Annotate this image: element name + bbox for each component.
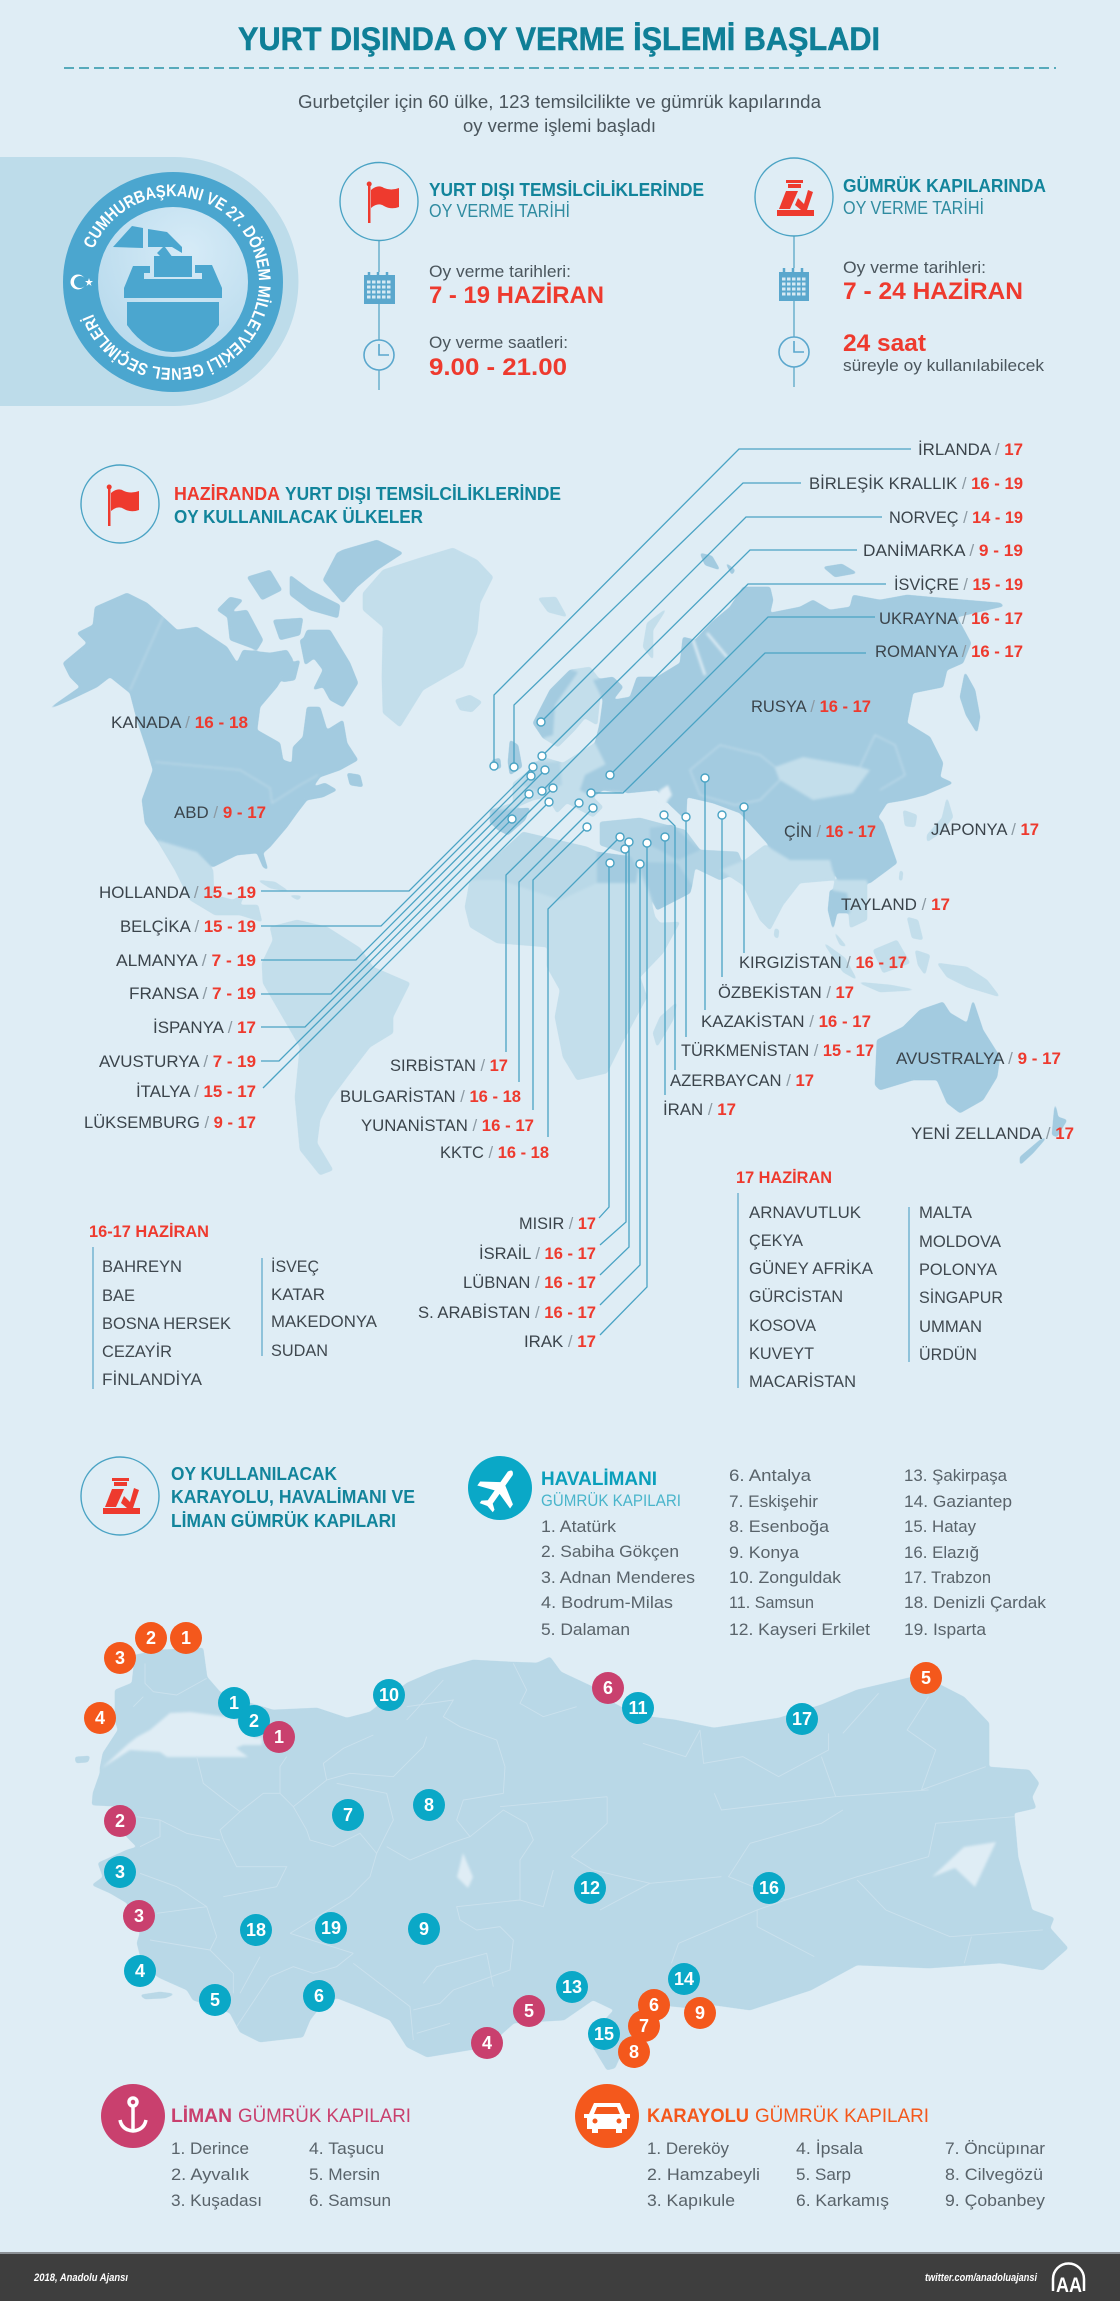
country labels: Europe right column: ROMANYA / 16 - 17 <box>875 642 1023 661</box>
map heading <box>81 465 561 543</box>
country labels: Europe right column <box>809 440 1023 661</box>
road gate list: 3. Kapıkule <box>647 2191 735 2210</box>
heading: GÜMRÜK KAPILARI <box>755 2106 929 2127</box>
heading text <box>174 484 561 527</box>
Madagascar <box>653 1002 677 1047</box>
road gate list: 8. Cilvegözü <box>945 2165 1043 2184</box>
airport pins: 3 <box>115 1862 125 1882</box>
country labels: Europe left column: AVUSTURYA / 7 - 19 <box>99 1052 256 1071</box>
country labels: Europe right column: UKRAYNA / 16 - 17 <box>879 609 1023 628</box>
road gate list: 5. Sarp <box>796 2165 851 2184</box>
country labels: Americas and world <box>111 697 1074 1143</box>
Middle East <box>600 818 745 910</box>
road gate pins: 5 <box>921 1668 931 1688</box>
duration text <box>843 330 1045 375</box>
Siberian river estuaries <box>693 633 727 675</box>
duration text: süreyle oy kullanılabilecek <box>843 356 1045 375</box>
panel: 17 June country list: ÜRDÜN <box>919 1345 977 1364</box>
New Zealand <box>1020 1102 1067 1165</box>
panel: 16-17 June country list: 16-17 HAZİRAN <box>89 1222 209 1241</box>
country labels: Europe left column: LÜKSEMBURG / 9 - 17 <box>84 1113 256 1132</box>
airport list: 6. Antalya <box>729 1466 812 1485</box>
airport pins: 2 <box>249 1711 259 1731</box>
road gate list: 6. Karkamış <box>796 2191 889 2210</box>
airport list: 19. Isparta <box>904 1620 987 1639</box>
Southeast Asia <box>832 880 867 928</box>
airport list: 16. Elazığ <box>904 1543 979 1562</box>
panel: 16-17 June country list: SUDAN <box>271 1341 328 1360</box>
airport pins: 12 <box>580 1878 600 1898</box>
heading text: KARAYOLU, HAVALİMANI VE <box>171 1487 415 1507</box>
port list <box>171 2139 391 2210</box>
heading: HAVALİMANI <box>541 1469 657 1490</box>
country labels: Middle East: IRAK / 17 <box>524 1332 596 1351</box>
port list: 2. Ayvalık <box>171 2165 250 2184</box>
panel: 17 June country list: SİNGAPUR <box>919 1288 1003 1307</box>
panel: 17 June country list: ÇEKYA <box>749 1231 804 1250</box>
road gate pins: 7 <box>639 2016 649 2036</box>
province borders west <box>133 1663 577 2040</box>
port list: 5. Mersin <box>309 2165 380 2184</box>
port list: 1. Derince <box>171 2139 249 2158</box>
port list: 6. Samsun <box>309 2191 391 2210</box>
port pins <box>104 1672 624 2059</box>
road gate list: 9. Çobanbey <box>945 2191 1046 2210</box>
panel: 16-17 June country list: MAKEDONYA <box>271 1312 378 1331</box>
country location dots <box>490 718 748 868</box>
panel: port customs gates <box>101 2084 411 2210</box>
airport list <box>541 1466 1047 1639</box>
country labels: Europe left column: BELÇİKA / 15 - 19 <box>120 917 256 936</box>
country labels: Europe right column: NORVEÇ / 14 - 19 <box>889 508 1023 527</box>
dates text <box>843 258 1023 305</box>
country labels: Middle East: MISIR / 17 <box>519 1214 596 1233</box>
airport pins: 7 <box>343 1805 353 1825</box>
road gate list: 4. İpsala <box>796 2139 864 2158</box>
Greenland <box>363 548 493 727</box>
Scandinavia <box>533 667 600 747</box>
world map <box>47 540 1067 1175</box>
airport pins: 1 <box>229 1693 239 1713</box>
country labels: Central Asia: TÜRKMENİSTAN / 15 - 17 <box>681 1041 874 1060</box>
panel: airport customs gates <box>468 1456 1047 1639</box>
heading: GÜMRÜK KAPILARINDA <box>843 176 1046 196</box>
country labels: Middle East: S. ARABİSTAN / 16 - 17 <box>418 1303 596 1322</box>
UK and Ireland <box>491 740 522 775</box>
country labels: Europe right column: İSVİÇRE / 15 - 19 <box>894 575 1023 594</box>
icon: ballot box <box>113 226 222 352</box>
heading: KARAYOLU <box>647 2106 749 2127</box>
dates text: Oy verme tarihleri: <box>843 258 986 277</box>
icon: airplane <box>468 1456 532 1520</box>
country labels: Europe right column: İRLANDA / 17 <box>918 440 1023 459</box>
US-Canada borders <box>130 617 318 803</box>
icon: flag <box>81 465 159 543</box>
road gate pins: 4 <box>95 1708 105 1728</box>
country labels: Balkans: SIRBİSTAN / 17 <box>390 1056 508 1075</box>
panel: representations voting dates <box>340 162 704 390</box>
port pins: 2 <box>115 1811 125 1831</box>
airport list: 9. Konya <box>729 1543 800 1562</box>
airport pins: 14 <box>674 1969 694 1989</box>
panel: 17 June country list <box>736 1168 1003 1391</box>
country labels: Europe left column: İSPANYA / 17 <box>153 1018 256 1037</box>
icon: clock <box>364 340 394 370</box>
airport pins: 15 <box>594 2024 614 2044</box>
dates text: 7 - 19 HAZİRAN <box>429 282 604 309</box>
icon: AA logo <box>1053 2264 1084 2297</box>
icon: flag <box>340 162 418 240</box>
airport pins: 19 <box>321 1918 341 1938</box>
road gate pins: 2 <box>146 1628 156 1648</box>
country labels: Europe left column: İTALYA / 15 - 17 <box>136 1082 256 1101</box>
road gate pins <box>84 1622 942 2068</box>
leader lines <box>261 449 911 1335</box>
heading text: OY KULLANILACAK ÜLKELER <box>174 507 423 527</box>
panel: 16-17 June country list: İSVEÇ <box>271 1257 319 1276</box>
duration text: 24 saat <box>843 330 926 357</box>
panel: 16-17 June country list: BOSNA HERSEK <box>102 1314 232 1333</box>
country labels: Europe left column: FRANSA / 7 - 19 <box>129 984 256 1003</box>
heading: LİMAN <box>171 2106 232 2127</box>
airport pins: 18 <box>246 1920 266 1940</box>
port pins: 6 <box>603 1678 613 1698</box>
airport list: 1. Atatürk <box>541 1517 617 1536</box>
country labels: Balkans <box>340 1056 549 1162</box>
panel: 16-17 June country list: BAHREYN <box>102 1257 182 1276</box>
customs gates heading <box>81 1457 415 1535</box>
icon: anchor <box>101 2084 165 2148</box>
dates text: Oy verme tarihleri: <box>429 262 571 281</box>
country labels: Central Asia: KIRGIZİSTAN / 16 - 17 <box>739 953 907 972</box>
heading: YURT DIŞI TEMSİLCİLİKLERİNDE <box>429 180 704 200</box>
panel: 16-17 June country list: BAE <box>102 1286 135 1305</box>
Arctic Russian islands <box>538 597 667 660</box>
icon: calendar <box>364 272 395 304</box>
icon: customs officer <box>755 158 833 236</box>
Egypt <box>597 852 640 883</box>
heading <box>843 176 1046 218</box>
icon: calendar <box>779 268 809 301</box>
panel: 17 June country list: KOSOVA <box>749 1316 817 1335</box>
heading <box>429 180 704 221</box>
Korea <box>903 810 917 827</box>
Africa <box>465 832 680 1080</box>
Russia and northern Asia <box>593 587 1004 883</box>
Turkey landmass <box>75 1648 1068 2070</box>
heading: GÜMRÜK KAPILARI <box>541 1491 681 1510</box>
heading: OY VERME TARİHİ <box>429 201 570 221</box>
country labels: Europe left column <box>84 883 256 1132</box>
Caspian Sea <box>656 785 672 820</box>
panel: 16-17 June country list: FİNLANDİYA <box>102 1370 203 1389</box>
country labels: Americas and world: KANADA / 16 - 18 <box>111 713 248 732</box>
airport pins: 11 <box>628 1698 648 1718</box>
road gate pins: 3 <box>115 1648 125 1668</box>
port pins: 1 <box>274 1727 284 1747</box>
panel: 17 June country list: POLONYA <box>919 1260 998 1279</box>
country labels: Americas and world: TAYLAND / 17 <box>841 895 950 914</box>
Sakhalin <box>960 672 980 733</box>
country labels: Middle East: İSRAİL / 16 - 17 <box>479 1244 596 1263</box>
country labels: Balkans: BULGARİSTAN / 16 - 18 <box>340 1087 521 1106</box>
airport list: 12. Kayseri Erkilet <box>729 1620 870 1639</box>
country labels: Americas and world: RUSYA / 16 - 17 <box>751 697 871 716</box>
airport list: 7. Eskişehir <box>729 1492 818 1511</box>
airport list: 13. Şakirpaşa <box>904 1466 1008 1485</box>
airport pins: 17 <box>792 1709 812 1729</box>
badge ring text: CUMHURBAŞKANI VE 27. DÖNEM MİLLETVEKİLİ GENEL SEÇİMLERİ <box>80 184 272 380</box>
Canada and USA <box>47 593 358 870</box>
heading: GÜMRÜK KAPILARI <box>238 2106 411 2127</box>
dates text <box>429 262 604 309</box>
country labels: Central Asia: İRAN / 17 <box>663 1100 736 1119</box>
subtitle: Gurbetçiler için 60 ülke, 123 temsilcilikte ve gümrük kapılarında <box>298 92 822 112</box>
panel: 17 June country list: MALTA <box>919 1203 973 1222</box>
heading: OY VERME TARİHİ <box>843 198 984 218</box>
hours text: 9.00 - 21.00 <box>429 354 567 381</box>
panel: election badge <box>0 157 298 406</box>
heading <box>541 1469 681 1510</box>
airport pins: 6 <box>314 1986 324 2006</box>
airport pins: 4 <box>135 1961 145 1981</box>
airport pins: 9 <box>419 1919 429 1939</box>
country labels: Central Asia: ÖZBEKİSTAN / 17 <box>718 983 854 1002</box>
province borders east <box>500 1693 1043 1963</box>
airport pins: 5 <box>210 1990 220 2010</box>
country labels: Balkans: YUNANİSTAN / 16 - 17 <box>361 1116 534 1135</box>
Europe <box>490 743 633 830</box>
heading text: OY KULLANILACAK <box>171 1464 337 1484</box>
country labels: Europe left column: HOLLANDA / 15 - 19 <box>99 883 256 902</box>
country labels: Europe left column: ALMANYA / 7 - 19 <box>116 951 256 970</box>
icon: customs officer <box>81 1457 159 1535</box>
panel: road customs gates <box>575 2084 1046 2210</box>
Mexico and Central America <box>157 840 262 922</box>
map of Turkey <box>75 1648 1068 2070</box>
airport list: 14. Gaziantep <box>904 1492 1012 1511</box>
heading text <box>171 1464 415 1531</box>
country labels: Central Asia: KAZAKİSTAN / 16 - 17 <box>701 1012 871 1031</box>
country labels: Americas and world: ÇİN / 16 - 17 <box>784 822 876 841</box>
panel: 17 June country list: MOLDOVA <box>919 1232 1002 1251</box>
Arctic islands <box>217 540 403 787</box>
airport list: 5. Dalaman <box>541 1620 630 1639</box>
hours text: Oy verme saatleri: <box>429 333 568 352</box>
twitter handle: twitter.com/anadoluajansi <box>925 2272 1038 2284</box>
port pins: 5 <box>524 2001 534 2021</box>
road gate list: 1. Dereköy <box>647 2139 729 2158</box>
country labels: Americas and world: JAPONYA / 17 <box>931 820 1039 839</box>
road gate list: 7. Öncüpınar <box>945 2139 1045 2158</box>
panel: 17 June country list: MACARİSTAN <box>749 1372 856 1391</box>
road gate pins: 6 <box>649 1995 659 2015</box>
port list: 4. Taşucu <box>309 2139 384 2158</box>
icon: clock <box>779 337 809 367</box>
airport list: 18. Denizli Çardak <box>904 1593 1047 1612</box>
country labels: Central Asia: AZERBAYCAN / 17 <box>670 1071 814 1090</box>
road gate list <box>647 2139 1046 2210</box>
country labels: Europe right column: BİRLEŞİK KRALLIK / 16 - 19 <box>809 474 1023 493</box>
credit: 2018, Anadolu Ajansı <box>33 2272 128 2284</box>
panel: 16-17 June country list: KATAR <box>271 1285 325 1304</box>
Spain <box>490 808 530 835</box>
panel: 17 June country list: GÜRCİSTAN <box>749 1287 843 1306</box>
panel: 17 June country list: 17 HAZİRAN <box>736 1168 832 1187</box>
airport list: 3. Adnan Menderes <box>541 1568 695 1587</box>
panel: 17 June country list: UMMAN <box>919 1317 982 1336</box>
airport list: 8. Esenboğa <box>729 1517 830 1536</box>
country labels: Americas and world: ABD / 9 - 17 <box>174 803 266 822</box>
airport pins <box>104 1679 818 2050</box>
heading text: HAZİRANDA <box>174 484 280 504</box>
panel: 16-17 June country list: CEZAYİR <box>102 1342 172 1361</box>
hours text <box>429 333 568 381</box>
road gate pins: 8 <box>629 2042 639 2062</box>
Caribbean <box>257 880 302 900</box>
icon: car <box>575 2084 639 2148</box>
country labels: Middle East <box>418 1214 596 1351</box>
airport list: 17. Trabzon <box>904 1568 991 1587</box>
airport list: 11. Samsun <box>729 1593 814 1612</box>
road gate pins: 1 <box>181 1628 191 1648</box>
icon: crescent and star <box>70 274 93 290</box>
heading text: LİMAN GÜMRÜK KAPILARI <box>171 1511 396 1531</box>
heading <box>647 2106 929 2127</box>
country labels: Middle East: LÜBNAN / 16 - 17 <box>463 1273 596 1292</box>
India <box>720 845 835 930</box>
port pins: 3 <box>134 1906 144 1926</box>
country labels: Americas and world: YENİ ZELLANDA / 17 <box>911 1124 1074 1143</box>
country labels: Balkans: KKTC / 16 - 18 <box>440 1143 549 1162</box>
subtitle <box>298 92 822 136</box>
country labels: Americas and world: AVUSTRALYA / 9 - 17 <box>896 1049 1061 1068</box>
Ukraine and Romania <box>580 762 633 797</box>
country labels: Central Asia <box>663 953 907 1119</box>
Australia <box>875 1000 1000 1113</box>
airport list: 15. Hatay <box>904 1517 976 1536</box>
road gate pins: 9 <box>695 2003 705 2023</box>
panel: customs gates voting dates <box>755 158 1046 387</box>
airport pins: 8 <box>424 1795 434 1815</box>
Japan <box>927 797 953 842</box>
panel: 16-17 June country list <box>89 1222 378 1389</box>
airport list: 2. Sabiha Gökçen <box>541 1542 679 1561</box>
dates text: 7 - 24 HAZİRAN <box>843 278 1023 305</box>
road gate list: 2. Hamzabeyli <box>647 2165 760 2184</box>
icon: AA logo: AA <box>1056 2274 1082 2297</box>
heading text: YURT DIŞI TEMSİLCİLİKLERİNDE <box>285 484 561 504</box>
airport pins: 10 <box>379 1685 399 1705</box>
subtitle: oy verme işlemi başladı <box>463 116 656 136</box>
panel: 17 June country list: ARNAVUTLUK <box>749 1203 862 1222</box>
airport pins: 16 <box>759 1878 779 1898</box>
airport pins: 13 <box>562 1977 582 1997</box>
South America <box>262 920 410 1175</box>
title: YURT DIŞINDA OY VERME İŞLEMİ BAŞLADI <box>238 21 880 57</box>
airport list: 4. Bodrum-Milas <box>541 1593 673 1612</box>
country labels: Europe right column: DANİMARKA / 9 - 19 <box>863 541 1023 560</box>
panel: 17 June country list: KUVEYT <box>749 1344 814 1363</box>
Mongolia <box>775 757 870 800</box>
port pins: 4 <box>482 2033 492 2053</box>
Iceland <box>455 695 482 712</box>
footer <box>0 2252 1120 2301</box>
airport list: 10. Zonguldak <box>729 1568 842 1587</box>
port list: 3. Kuşadası <box>171 2191 262 2210</box>
panel: 17 June country list: GÜNEY AFRİKA <box>749 1259 874 1278</box>
